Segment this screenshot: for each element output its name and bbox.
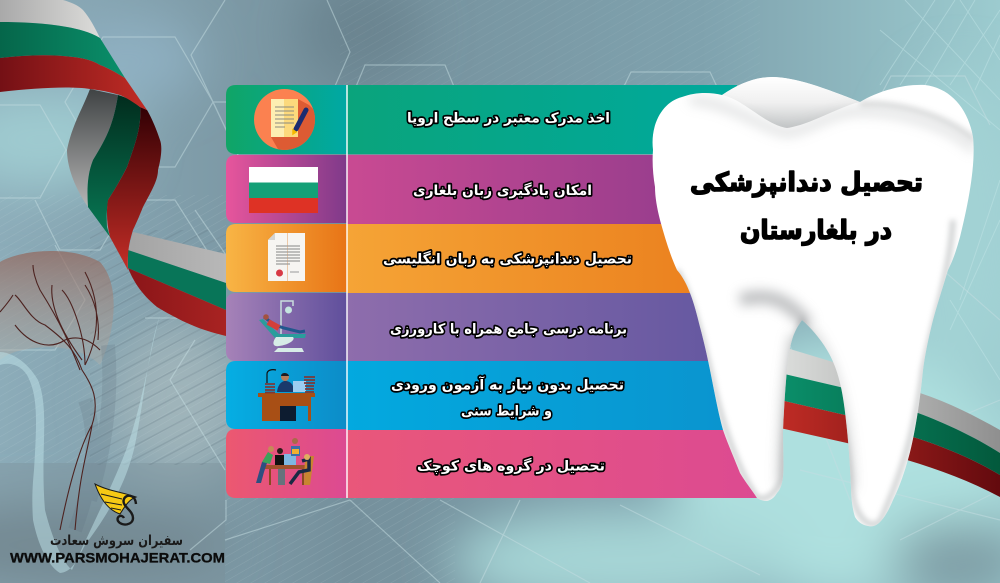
label: امکان یادگیری زبان بلغاری (413, 182, 592, 199)
icon: winged S bird (95, 484, 136, 525)
nerve (0, 265, 100, 530)
label: اخذ مدرک معتبر در سطح اروپا (407, 110, 610, 126)
upper band (0, 0, 100, 38)
panel: row 5 (226, 361, 770, 430)
panel: row 1 (226, 85, 737, 154)
fine mesh lines, upper right (880, 0, 1000, 380)
label: تحصیل دندانپزشکی به زبان انگلیسی (383, 250, 632, 268)
label: تحصیل بدون نیاز به آزمون ورودی (391, 376, 624, 394)
lower band running to the rows (128, 232, 226, 283)
title: تحصیل دندانپزشکی (690, 168, 923, 198)
icon: document and pen (254, 89, 315, 150)
company name: سفیران سروش سعادت (50, 533, 183, 549)
fold (67, 89, 118, 207)
icon: dental chair with patient (259, 301, 306, 352)
label (391, 376, 624, 420)
label: و شرایط سنی (461, 404, 552, 420)
panel: row 2 (226, 155, 770, 224)
icon: Bulgarian flag (249, 167, 318, 213)
vertical divider (346, 85, 348, 498)
tooth (640, 70, 985, 535)
x-ray tooth illustration (0, 251, 160, 573)
title: در بلغارستان (740, 216, 892, 246)
back cusp (722, 77, 860, 128)
website url: WWW.PARSMOHAJERAT.COM (10, 550, 225, 566)
panel: row 6 (226, 429, 770, 498)
icon: certificate document (268, 233, 305, 281)
icon: person studying at desk (258, 370, 315, 421)
panel: row 4 (226, 293, 770, 361)
icon: group of students around table (256, 438, 314, 485)
label: تحصیل در گروه های کوچک (417, 458, 605, 474)
logo: Parsmohajerat (10, 484, 225, 566)
flag ribbon: top left (0, 0, 226, 336)
panel: row 3 (226, 224, 770, 293)
title (690, 168, 923, 246)
flag ribbon: bottom right (780, 346, 1000, 497)
label: برنامه درسی جامع همراه با کارورزی (390, 322, 627, 338)
